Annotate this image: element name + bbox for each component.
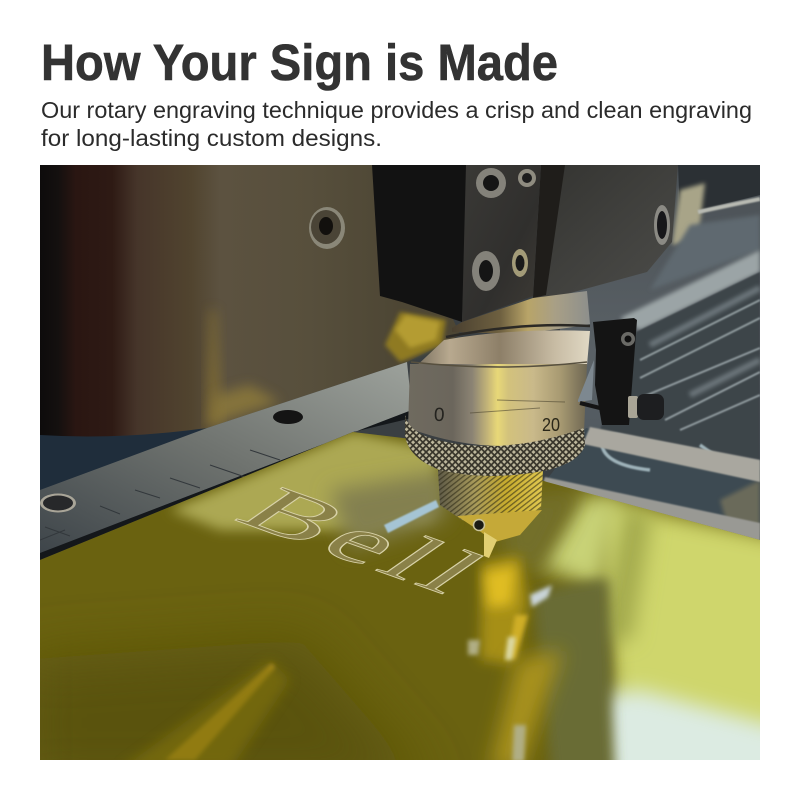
plate: grey reflection behind letters [330,470,450,550]
plate: dark lower-left shade [40,644,392,760]
description text: for long-lasting custom designs. [41,125,382,151]
icon: bracket screw [628,396,638,418]
engraving head: spindle: 20 [542,415,560,435]
second head block: right [533,165,678,298]
description text [41,97,752,151]
engraved letters on plate: Bell [216,474,516,608]
black bracket [578,318,664,425]
plate: pale blue-white reflection [603,676,760,760]
plate: lime lit area [598,496,760,737]
plate: lower-left gold streak [165,663,275,760]
description text: Our rotary engraving technique provides a crisp and clean engraving [41,97,752,123]
photo: rotary engraver on brass plate [40,165,760,760]
background: machine bed, right [560,165,760,470]
metal wall panel [40,165,460,436]
knurled ring [405,415,585,476]
first head block: left [372,165,541,322]
plate: shadow column [533,578,615,790]
plate: lit column [537,495,620,590]
background: engraved template panel [540,427,760,548]
plate: darker slanted band [612,512,658,646]
engraving head: spindle [405,325,590,558]
plate: golden streak below tip [480,555,528,665]
icon: wall socket screw [309,207,345,249]
dark underside, left [40,428,206,490]
lower sleeve [438,470,543,520]
spindle neck [452,291,590,333]
title: How Your Sign is Made [41,34,558,91]
collar [418,330,590,364]
dial graduation marks [470,400,565,413]
plate: blue reflection [384,500,439,533]
dial numbers: 0 [434,405,445,426]
plate: dark olive right of tip [500,490,580,570]
tool nozzle [457,510,542,542]
plate: pale olive reflection [170,432,440,530]
icon: head screws [476,168,506,198]
dial cylinder [408,364,587,446]
steel ruler strip [40,362,412,560]
brass plate [40,432,760,760]
plate: pale glints [505,637,516,660]
